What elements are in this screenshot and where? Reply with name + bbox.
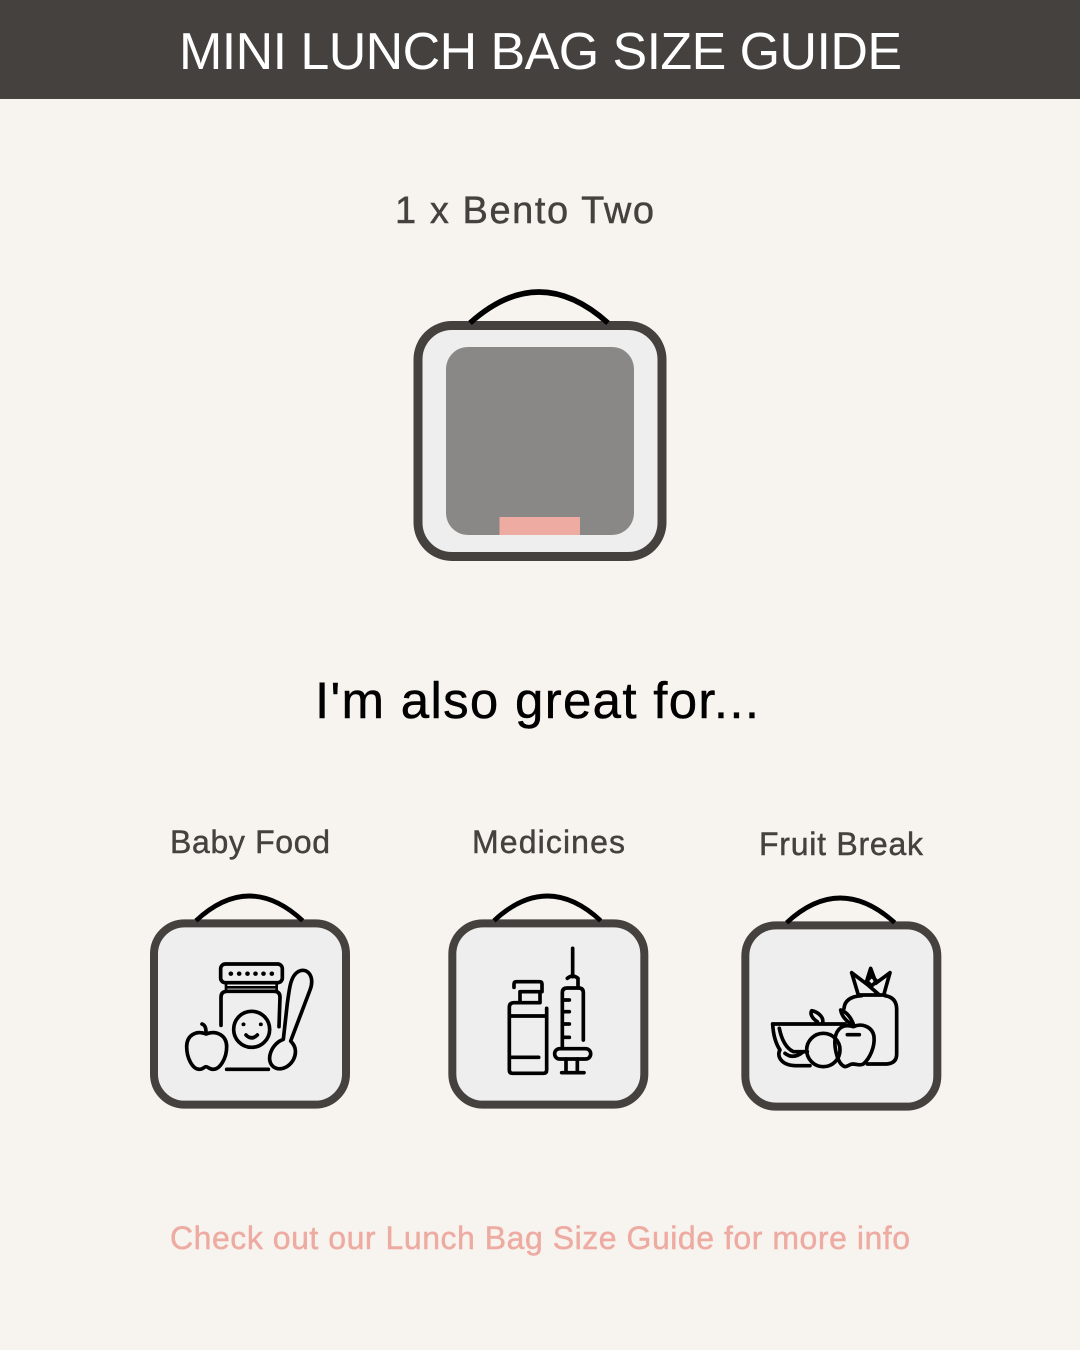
illustration: large lunch bag <box>418 292 662 556</box>
title banner: MINI LUNCH BAG SIZE GUIDE <box>179 23 902 81</box>
heading: I'm also great for: I'm also great for... <box>315 672 759 729</box>
title banner <box>0 0 1080 99</box>
bag icon: baby food <box>154 896 346 1105</box>
label: Fruit Break: Fruit Break <box>759 826 924 862</box>
icon: bowl and fruit <box>773 968 897 1067</box>
bag icon: fruit break <box>745 898 937 1107</box>
label: Baby Food: Baby Food <box>170 824 330 860</box>
heading: 1 x Bento Two: 1 x Bento Two <box>395 190 654 232</box>
footer call to action: Check out our Lunch Bag Size Guide for more info <box>170 1220 910 1256</box>
icon: jar, apple and spoon <box>187 964 312 1069</box>
icon: bottle and syringe <box>509 948 591 1073</box>
label: Medicines: Medicines <box>472 824 625 860</box>
bag icon: medicines <box>452 896 644 1105</box>
